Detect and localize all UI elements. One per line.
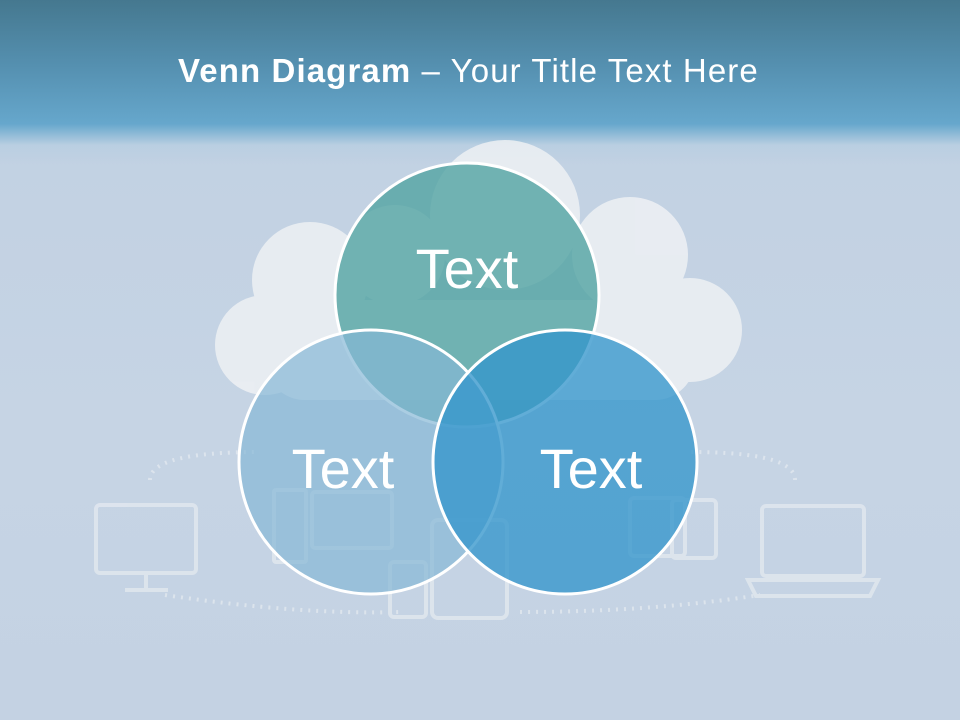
label: left: Text — [292, 437, 395, 500]
circle: right — [433, 330, 697, 594]
circle: left — [239, 330, 503, 594]
label: right: Text — [540, 437, 643, 500]
devices network — [96, 452, 878, 618]
label: top: Text — [416, 237, 519, 300]
cloud background — [215, 140, 742, 400]
title: Venn Diagram – Your Title Text Here — [178, 52, 759, 89]
header band — [0, 0, 960, 165]
circle: top — [335, 163, 599, 427]
